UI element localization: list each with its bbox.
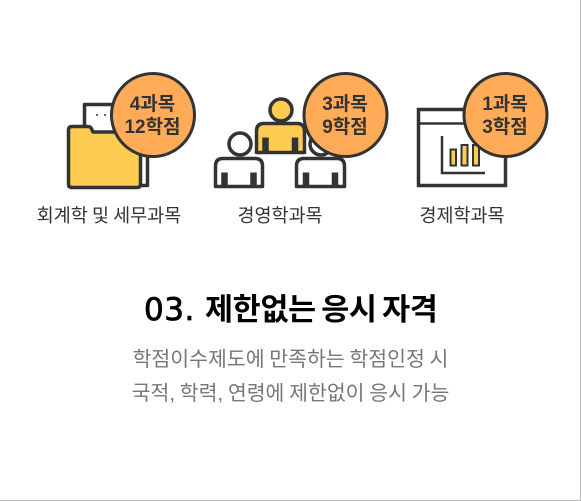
badge: 4 courses 12 credits: 12학점 xyxy=(124,116,181,138)
label: accounting courses: 회계학 및 세무과목 xyxy=(37,205,181,226)
title: 03. xyxy=(144,292,195,328)
badge: 1 course 3 credits: 1과목 xyxy=(482,93,528,115)
badge: 3 courses 9 credits: 3과목 xyxy=(322,93,368,115)
label: economics courses: 경제학과목 xyxy=(419,205,505,226)
person: centre yellow xyxy=(256,99,304,152)
description text: 학점이수제도에 만족하는 학점인정 시 xyxy=(133,348,448,371)
person: left xyxy=(216,133,262,186)
badge: 3 courses 9 credits: 9학점 xyxy=(322,116,368,138)
icon: bar chart window xyxy=(418,110,506,186)
badge: 1 course 3 credits: 3학점 xyxy=(482,116,528,138)
title: 제한없는 응시 자격 xyxy=(205,293,437,327)
badge: 4 courses 12 credits: 4과목 xyxy=(130,93,175,115)
person: right xyxy=(296,133,344,186)
label: business courses: 경영학과목 xyxy=(237,205,323,226)
icon: three people xyxy=(216,99,344,186)
description text xyxy=(132,348,449,405)
badge: 1 course 3 credits xyxy=(464,74,547,156)
badge: 4 courses 12 credits xyxy=(112,74,194,156)
icon: document folder xyxy=(68,104,148,188)
badge: 3 courses 9 credits xyxy=(304,74,387,156)
description text: 국적, 학력, 연령에 제한없이 응시 가능 xyxy=(132,382,449,405)
